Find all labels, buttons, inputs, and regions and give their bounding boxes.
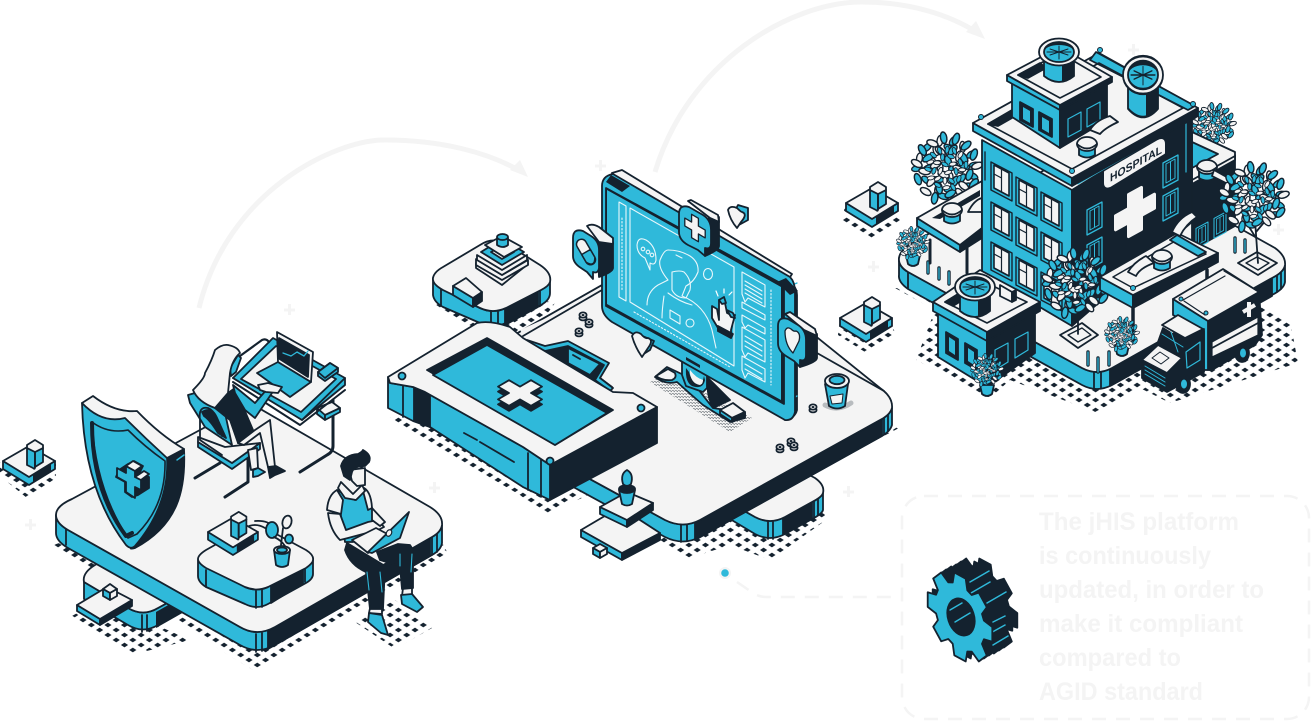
pedestal: far left [3,440,55,485]
text block: platform note: The jHIS platform [1039,508,1239,536]
laptop [352,512,409,553]
hatch shadow of stand [650,372,752,432]
icon: gear [928,558,1017,662]
torso [215,388,253,443]
icon: medical cross [116,461,149,498]
icon: plant [255,515,293,567]
tree: right [1211,153,1297,275]
badge: heart [778,312,817,367]
wing: back right [1192,132,1235,250]
illustrated doctor [647,250,716,348]
hair [193,345,240,408]
windows: right face [1087,202,1102,235]
small heart: upper [728,205,748,228]
rear wheel [1235,344,1249,362]
forearm [328,513,384,540]
cube [453,278,482,307]
badge: pill [573,225,613,279]
tree: left [903,124,991,212]
windows: left face [991,162,1012,201]
desk [233,332,345,472]
halftone shadows [0,205,1298,670]
hood [1142,345,1182,373]
text block: platform note: AGID standard [1039,678,1203,706]
depth [775,278,797,420]
kit top [388,322,657,465]
kit cavity [427,338,613,445]
icon: potted plant [619,470,635,506]
panel: left platform [56,332,442,652]
platform side [500,408,892,542]
roof [973,123,1072,186]
windshield [1158,328,1187,355]
screen content [619,202,771,385]
cup [825,374,851,408]
box blue band [1173,299,1208,370]
top rim [612,170,792,285]
icon: medical cross [487,374,553,417]
text block: platform note: is continuously [1039,542,1211,570]
small building [933,270,1040,387]
tree: front [1034,239,1120,348]
panel: centre platform [388,170,892,560]
text block: platform note [1039,508,1264,706]
ambulance [1142,269,1262,393]
panel: hospital complex [892,38,1297,396]
box side [1208,292,1262,370]
front wheel [1176,375,1190,393]
hair [341,450,370,480]
box top [1173,269,1259,321]
laptop [257,332,313,397]
arc arrow: second [655,2,985,172]
wing: right front [1100,212,1218,340]
chat bubbles [742,272,765,307]
hospital base [899,145,1285,389]
screen [606,188,784,404]
duct and mushroom vent on roof [1090,116,1118,134]
woman at desk [188,345,285,497]
text block: platform note: compared to [1039,644,1181,672]
monitor stand [655,360,745,422]
plant block and lower card [581,470,660,560]
vent: penthouse [1039,38,1079,82]
upper left tile [433,234,550,329]
kit back hollow [527,340,613,391]
tree: back right [1186,97,1242,153]
text block: platform note: make it compliant [1039,610,1244,638]
small heart: lower [632,332,654,357]
logo slot [686,357,700,368]
vent: right roof [1123,56,1163,117]
potted tree: centre [1100,312,1144,356]
pedestal: lower right of monitor [840,297,892,342]
cab body [1142,329,1204,392]
face [349,468,365,486]
icon: pointer hand [712,289,735,338]
inner tile with plant [198,512,313,608]
mug pad [318,363,338,381]
right wing tile [725,470,823,539]
back leg [402,588,412,596]
arm [233,385,272,418]
penthouse [1007,47,1112,148]
potted tree: small building [966,349,1007,396]
pedestal: upper right of monitor [846,182,898,227]
platform top [470,235,892,524]
first aid kit [388,322,657,500]
icon: hospital cross [1116,180,1154,244]
monitor [602,170,798,420]
decorative plus marks [25,44,1284,530]
potted tree: left [892,222,933,266]
arc arrow: first [199,140,528,308]
badge: cross [679,200,719,256]
vest [337,487,375,542]
platform side [56,515,442,650]
grille [1145,366,1165,386]
collar [338,482,365,500]
shield [82,396,184,549]
lower wing tile [77,545,200,632]
cab roof [1162,315,1203,338]
man with laptop [327,450,423,635]
main building [973,48,1198,326]
paper stack [476,234,528,285]
text block: platform note: updated, in order to [1039,576,1264,604]
legs [248,448,258,470]
bollards [928,238,1245,372]
chair [188,393,260,497]
card [77,584,132,625]
far sleeve [362,487,372,510]
lower card [581,507,660,560]
pegs [579,312,587,320]
upper block [600,507,627,527]
wing: left [917,181,982,273]
callout: dashed panel [719,496,1309,719]
platform top [56,403,442,632]
sign: HOSPITAL [1110,142,1162,185]
face [230,355,241,376]
sleeve [327,490,343,514]
front leg [369,608,382,614]
